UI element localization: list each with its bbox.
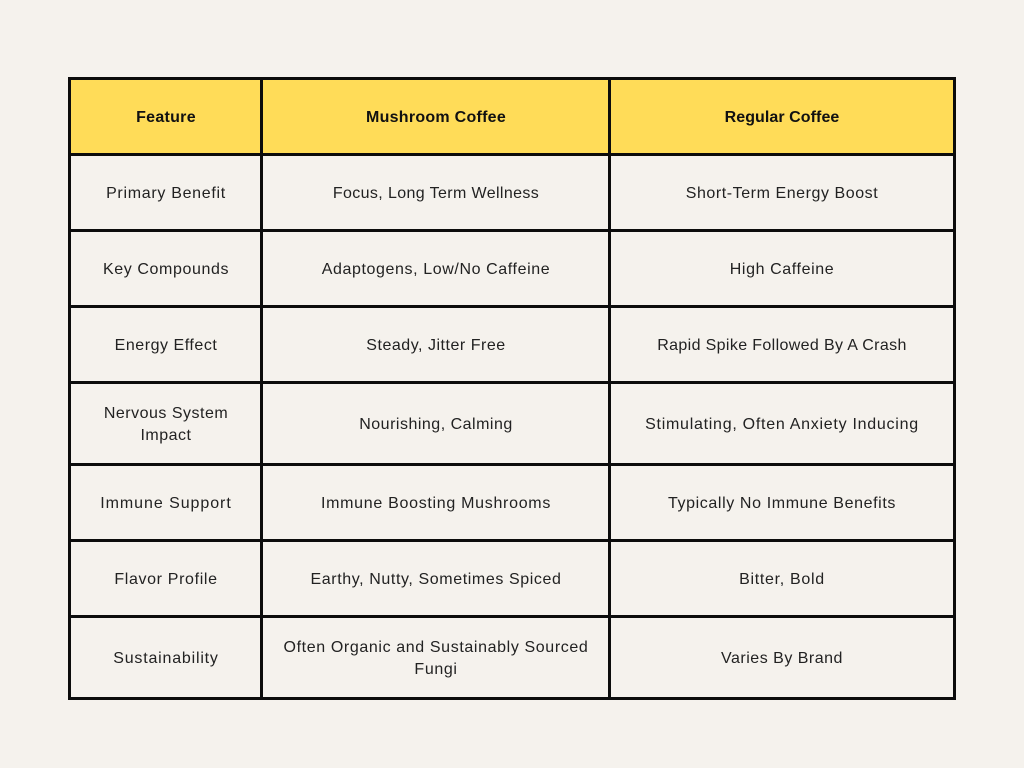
row: Flavor Profile regular: Bitter, Bold (739, 571, 825, 588)
row: Sustainability feature: Sustainability (113, 650, 219, 667)
comparison table (68, 77, 956, 700)
row: Energy Effect feature: Energy Effect (115, 337, 217, 354)
row: Key Compounds regular: High Caffeine (730, 261, 834, 278)
row: Sustainability mushroom: Fungi (414, 661, 458, 678)
row: Nervous System Impact feature: Impact (140, 427, 192, 444)
row: Sustainability regular: Varies By Brand (721, 650, 843, 667)
row: Key Compounds mushroom: Adaptogens, Low/No Caffeine (322, 261, 550, 278)
row: Primary Benefit feature: Primary Benefit (106, 185, 226, 202)
row: Immune Support feature: Immune Support (100, 495, 232, 512)
row: Flavor Profile mushroom: Earthy, Nutty, Sometimes Spiced (310, 571, 561, 588)
header: Regular Coffee: Regular Coffee (725, 109, 839, 126)
header: Mushroom Coffee: Mushroom Coffee (366, 109, 506, 126)
row: Primary Benefit regular: Short-Term Energy Boost (686, 185, 878, 202)
row: Nervous System Impact regular: Stimulating, Often Anxiety Inducing (645, 416, 919, 433)
row: Immune Support regular: Typically No Immune Benefits (668, 495, 896, 512)
row: Flavor Profile feature: Flavor Profile (114, 571, 218, 588)
header: Feature: Feature (136, 109, 196, 126)
row: Immune Support mushroom: Immune Boosting Mushrooms (321, 495, 551, 512)
row: Nervous System Impact feature: Nervous System (104, 405, 228, 422)
row: Sustainability mushroom (284, 639, 588, 678)
row: Sustainability mushroom: Often Organic and Sustainably Sourced (284, 639, 588, 656)
header row background (70, 79, 954, 154)
row: Primary Benefit mushroom: Focus, Long Term Wellness (333, 185, 539, 202)
row: Nervous System Impact mushroom: Nourishing, Calming (359, 416, 513, 433)
row: Nervous System Impact feature (104, 405, 228, 444)
row: Energy Effect regular: Rapid Spike Followed By A Crash (657, 337, 907, 354)
row: Energy Effect mushroom: Steady, Jitter Free (366, 337, 506, 354)
table grid lines (68, 77, 956, 700)
row: Key Compounds feature: Key Compounds (103, 261, 229, 278)
